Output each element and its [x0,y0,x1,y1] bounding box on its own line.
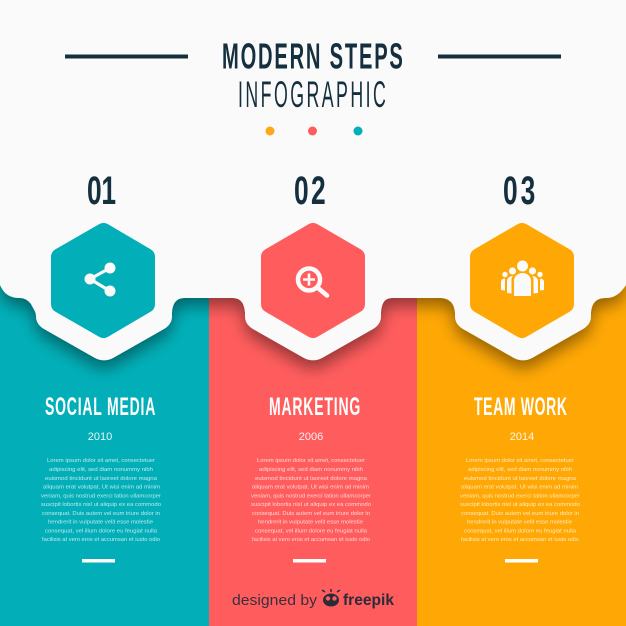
body text: team work: adipiscing elit, sed diam nonummy nibh [468,467,572,473]
body text: marketing: adipiscing elit, sed diam nonummy nibh [259,467,363,473]
body text: marketing: veniam, quis nostrud exerci tation ullamcorper [251,494,371,500]
year 2006: 2006 [299,431,323,443]
body text: social media: adipiscing elit, sed diam nonummy nibh [49,467,153,473]
body text: team work: euismod tincidunt ut laoreet dolore magna [464,476,576,482]
panel: team work background [417,270,626,626]
number 01: 01 [87,169,116,213]
number 03: 03 [503,169,535,213]
year 2010: 2010 [88,431,112,443]
body text: team work: consequat. Duis autem vel eum iriure dolor in [461,511,579,517]
body text: social media: aliquam erat volutpat. Ut wisi enim ad minim [43,484,161,490]
body text: social media: facilisis at vero eros et accumsan et iusto odio [42,537,160,543]
body text: marketing: Lorem ipsum dolor sit amet, consectetuer [257,458,365,464]
credit: freepik wordmark: freepik [343,592,394,609]
heading: team work: TEAM WORK [474,394,567,421]
icon: freepik logo [322,589,340,606]
body text: team work: suscipit lobortis nisl ut aliquip ex ea commodo [460,502,580,508]
hexagon: team work [479,232,565,329]
hexagon: social media [60,232,146,329]
accent bar 2 [293,559,326,562]
body text: social media: Lorem ipsum dolor sit amet, consectetuer [47,458,155,464]
title rule left [65,54,188,58]
body text: team work: veniam, quis nostrud exerci tation ullamcorper [460,494,580,500]
body text: social media [41,458,161,543]
icon: team [501,260,544,296]
decorative dots [266,126,362,136]
panel: social media background [0,270,209,626]
accent bar 3 [505,559,538,562]
hexagon: marketing [270,232,356,329]
icon: magnifier plus [298,268,327,296]
subtitle: INFOGRAPHIC [238,75,386,116]
title rule right [438,54,561,58]
panel: top white wave panel [0,0,626,360]
credit: designed by: designed by [232,592,318,609]
heading: marketing: MARKETING [269,394,360,421]
body text: social media: suscipit lobortis nisl ut aliquip ex ea commodo [41,502,161,508]
title: MODERN STEPS [222,38,403,77]
year 2014: 2014 [510,431,534,443]
body text: marketing: aliquam erat volutpat. Ut wisi enim ad minim [252,484,370,490]
body text: team work: aliquam erat volutpat. Ut wisi enim ad minim [461,484,579,490]
body text: team work: Lorem ipsum dolor sit amet, consectetuer [466,458,574,464]
body text: social media: consequat. Duis autem vel eum iriure dolor in [42,511,160,517]
body text: social media: consequat, vel illum dolore eu feugiat nulla [45,528,157,534]
body text: marketing: consequat, vel illum dolore eu feugiat nulla [255,528,367,534]
body text: marketing: suscipit lobortis nisl ut aliquip ex ea commodo [251,502,371,508]
accent bar 1 [82,559,115,562]
body text: team work: facilisis at vero eros et accumsan et iusto odio [461,537,579,543]
panel: marketing background [209,270,417,626]
body text: social media: euismod tincidunt ut laoreet dolore magna [45,476,157,482]
body text: social media: hendrerit in vulputate velit esse molestie [48,520,153,526]
body text: team work [460,458,580,543]
body text: marketing [251,458,371,543]
body text: team work: hendrerit in vulputate velit esse molestie [467,520,572,526]
icon: share [84,262,116,296]
heading: social media: SOCIAL MEDIA [45,394,156,421]
body text: marketing: facilisis at vero eros et accumsan et iusto odio [252,537,370,543]
number 02: 02 [294,169,326,213]
body text: social media: veniam, quis nostrud exerci tation ullamcorper [41,494,161,500]
body text: marketing: euismod tincidunt ut laoreet dolore magna [255,476,367,482]
body text: marketing: consequat. Duis autem vel eum iriure dolor in [252,511,370,517]
body text: team work: consequat, vel illum dolore eu feugiat nulla [464,528,576,534]
body text: marketing: hendrerit in vulputate velit esse molestie [258,520,363,526]
